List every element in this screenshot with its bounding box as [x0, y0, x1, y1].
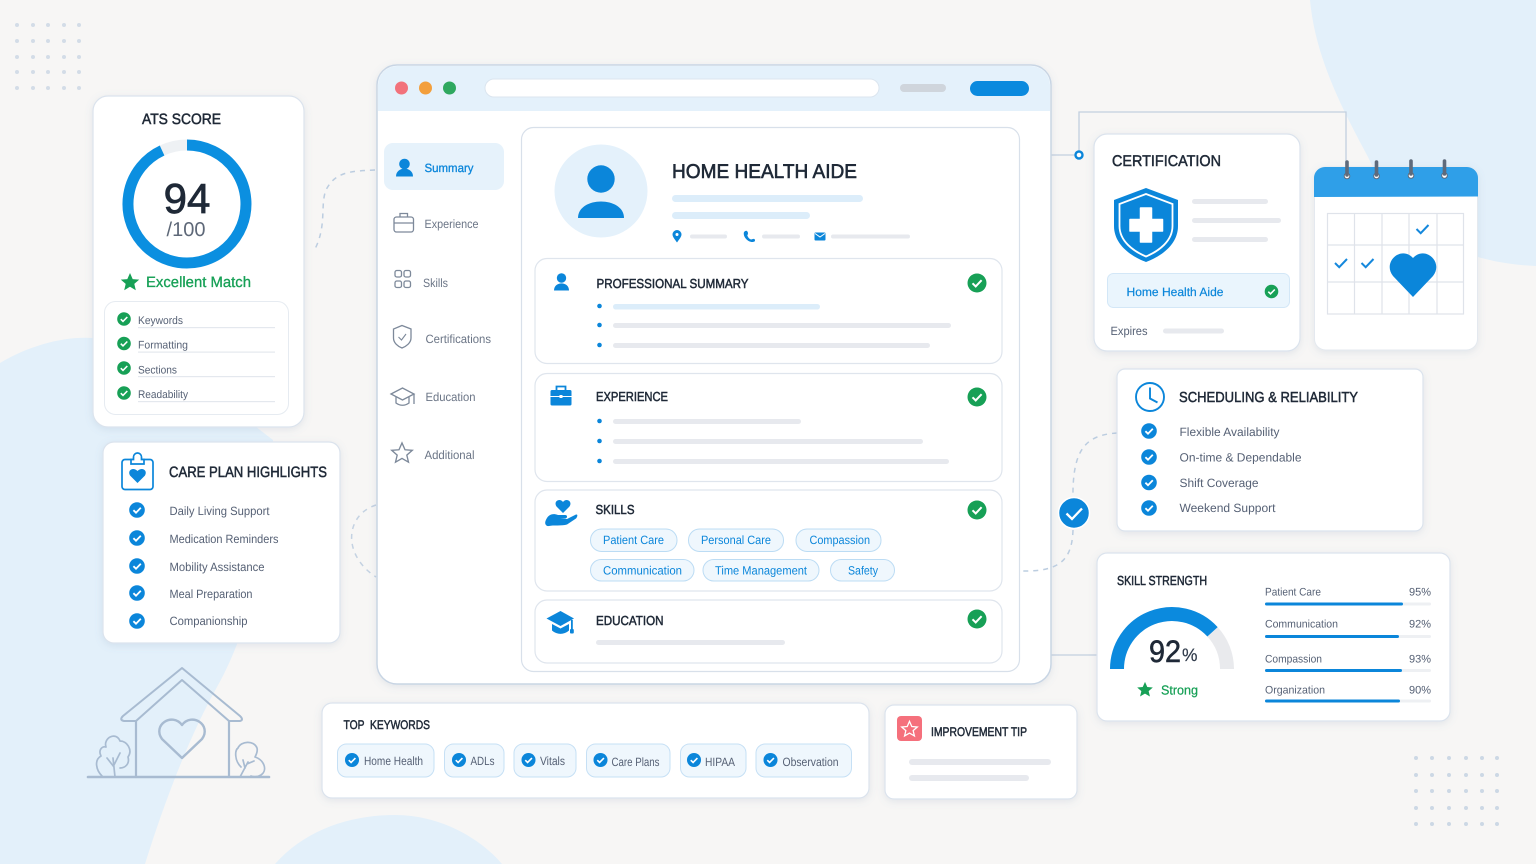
section: professional summary: PROFESSIONAL SUMMARY — [596, 276, 749, 291]
gauge value: 92 — [1149, 634, 1181, 669]
section: professional summary — [535, 258, 1002, 364]
care plan list — [129, 502, 278, 629]
name placeholder bars — [672, 195, 863, 219]
ATS checklist — [104, 302, 288, 414]
skill chips: Communication — [603, 564, 682, 578]
background blob: left — [0, 338, 273, 864]
score value: 94 — [164, 175, 210, 222]
icon: calendar heart — [1390, 253, 1436, 297]
connector: scheduling to window — [1020, 433, 1117, 571]
gauge rating: Strong — [1161, 682, 1198, 698]
keyword chips: HIPAA — [705, 755, 735, 769]
resume title: HOME HEALTH AIDE — [672, 161, 857, 183]
score denominator: /100 — [167, 219, 205, 241]
nav: certifications: Certifications — [426, 332, 491, 346]
dot grid: bottom right — [1414, 756, 1499, 826]
skill bars: Communication — [1265, 618, 1338, 630]
badge: connector check — [1058, 498, 1090, 528]
reliability list: Weekend Support — [1180, 501, 1276, 515]
calendar checks — [1335, 225, 1428, 267]
skill bars: Compassion — [1265, 654, 1322, 666]
nav: education — [391, 388, 476, 405]
reliability list: Shift Coverage — [1180, 476, 1259, 490]
certification detail bars — [1192, 199, 1281, 242]
ATS checklist: Sections — [138, 364, 177, 376]
section: skills: SKILLS — [596, 502, 635, 517]
icon: star badge — [897, 716, 922, 741]
heading: certification: CERTIFICATION — [1112, 153, 1221, 170]
keyword chips: Care Plans — [612, 755, 660, 769]
avatar — [554, 144, 648, 238]
connector node — [1076, 152, 1082, 158]
care plan list: Medication Reminders — [170, 532, 278, 546]
care plan list: Mobility Assistance — [170, 560, 265, 574]
expiry row — [1110, 324, 1224, 338]
sidebar navigation — [384, 143, 504, 462]
skill bars: 93% — [1409, 654, 1431, 666]
heading: ATS score: ATS SCORE — [142, 111, 221, 128]
panel: skill strength — [1097, 553, 1450, 721]
reliability list: Flexible Availability — [1180, 425, 1280, 439]
skill bars: 92% — [1409, 618, 1431, 630]
heading: care plan: CARE PLAN HIGHLIGHTS — [169, 464, 327, 481]
skill bars: Patient Care — [1265, 586, 1321, 598]
panel: top keywords — [322, 703, 869, 798]
ATS checklist: Formatting — [138, 340, 188, 352]
score ring — [128, 145, 246, 263]
keyword chips: ADLs — [470, 754, 494, 768]
heading: improvement tip: IMPROVEMENT TIP — [931, 725, 1027, 739]
skill bars — [1265, 586, 1431, 702]
keyword chips: Home Health — [364, 754, 423, 768]
background blob: bottom — [275, 815, 502, 864]
contact row — [672, 230, 910, 242]
section: experience: EXPERIENCE — [596, 389, 668, 404]
nav: summary: Summary — [424, 161, 474, 175]
care plan list: Companionship — [170, 614, 248, 628]
section: education — [535, 600, 1002, 663]
skill chips — [590, 529, 894, 581]
section: education: EDUCATION — [596, 613, 664, 628]
certification badge: Home Health Aide — [1126, 285, 1224, 299]
connector: window to calendar — [1051, 112, 1346, 165]
nav: additional — [392, 443, 474, 462]
nav: skills — [395, 270, 448, 290]
connector: care plan to window — [352, 505, 376, 577]
nav: experience — [394, 214, 479, 232]
skill chips: Personal Care — [701, 533, 771, 547]
keyword chips — [338, 744, 852, 777]
connector: window to skill strength — [1051, 654, 1097, 656]
icon: star — [121, 273, 139, 290]
dot grid: top left — [15, 23, 81, 90]
icon: clipboard heart — [122, 453, 153, 490]
tip placeholder bars — [909, 759, 1051, 781]
keyword chips: Observation — [782, 755, 838, 769]
section: skills — [535, 490, 1002, 591]
nav: certifications — [394, 326, 491, 348]
care plan list: Daily Living Support — [170, 504, 270, 518]
ATS checklist: Readability — [138, 389, 188, 401]
nav: experience: Experience — [424, 217, 479, 231]
skill bars: Organization — [1265, 684, 1325, 696]
icon: shield with cross — [1114, 188, 1178, 262]
calendar rings — [1344, 161, 1447, 179]
skill chips: Patient Care — [603, 533, 664, 547]
keyword chips: Vitals — [540, 754, 565, 768]
heading: scheduling: SCHEDULING & RELIABILITY — [1179, 390, 1358, 406]
skill chips: Safety — [848, 564, 878, 578]
skill chips: Time Management — [715, 564, 808, 578]
excellent match label: Excellent Match — [146, 274, 251, 291]
browser title bar — [378, 66, 1050, 111]
care plan list: Meal Preparation — [170, 587, 252, 601]
panel: improvement tip — [885, 705, 1077, 799]
calendar illustration — [1314, 161, 1478, 350]
panel: browser window — [377, 65, 1051, 684]
section: experience — [535, 374, 1002, 482]
gauge value: % — [1182, 645, 1198, 665]
gauge — [1117, 614, 1227, 669]
panel: certification — [1094, 134, 1300, 351]
nav: summary — [396, 159, 474, 176]
reliability list — [1141, 423, 1302, 516]
heading: top keywords: TOP KEYWORDS — [344, 718, 430, 732]
connector: ATS to window — [315, 170, 375, 249]
illustration: house with heart and trees — [88, 668, 269, 777]
heading: skill strength: SKILL STRENGTH — [1117, 573, 1207, 588]
skill bars: 90% — [1409, 684, 1431, 696]
calendar grid — [1328, 214, 1464, 314]
panel: resume — [522, 128, 1020, 672]
panel: care plan highlights — [103, 442, 340, 643]
nav: education: Education — [426, 390, 476, 404]
ATS checklist: Keywords — [138, 315, 183, 327]
certification badge — [1108, 274, 1290, 308]
reliability list: On-time & Dependable — [1180, 450, 1302, 464]
panel: ATS score — [93, 96, 304, 427]
icon: clock — [1136, 383, 1164, 411]
nav: additional: Additional — [424, 448, 474, 462]
skill bars: 95% — [1409, 586, 1431, 598]
gauge rating — [1137, 682, 1198, 698]
skill chips: Compassion — [810, 533, 870, 547]
expiry row: Expires — [1110, 324, 1148, 338]
nav: skills: Skills — [423, 276, 448, 290]
panel: scheduling and reliability — [1117, 369, 1423, 531]
background blob: top right — [1310, 0, 1536, 266]
